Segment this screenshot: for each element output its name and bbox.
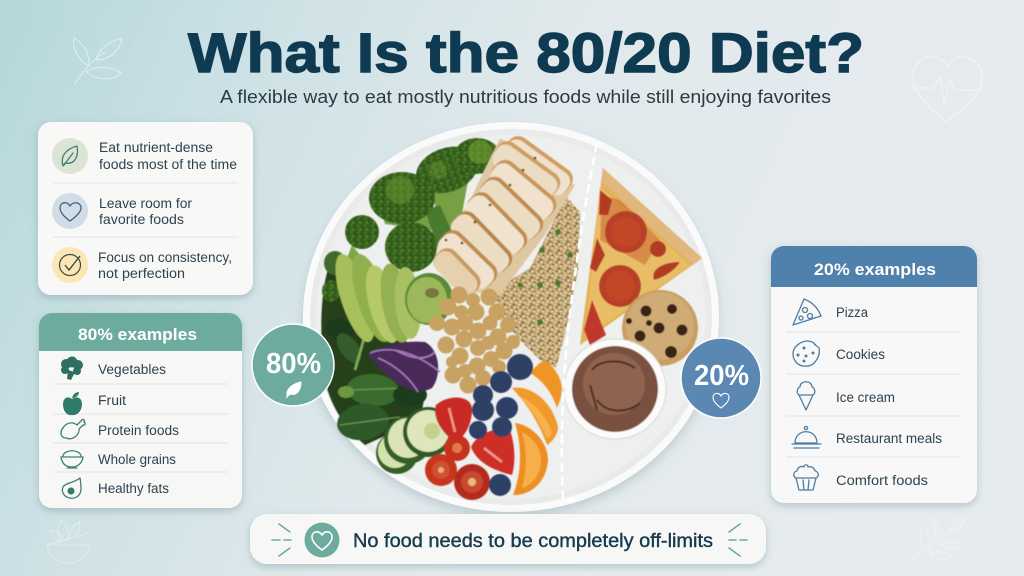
icon: left sparks bbox=[272, 524, 291, 556]
text: nutrient-dense: foods most of the time bbox=[99, 157, 237, 172]
text: nutrient-dense: Eat nutrient-dense bbox=[99, 140, 213, 155]
callout text: No food needs to be completely off-limits bbox=[353, 530, 713, 552]
salad greens bbox=[321, 251, 430, 445]
plate bbox=[303, 122, 719, 512]
heading: 20% examples bbox=[814, 260, 936, 279]
callout: no food off-limits bbox=[250, 514, 766, 564]
icon: right sparks bbox=[729, 524, 747, 556]
quinoa bbox=[495, 195, 580, 368]
pizza slice bbox=[580, 168, 702, 345]
label: Protein foods bbox=[98, 423, 179, 438]
food: 20% side bbox=[564, 168, 702, 439]
icon: avocado bbox=[62, 478, 81, 498]
text: favorite foods: Leave room for bbox=[99, 196, 193, 211]
sliced chicken bbox=[429, 132, 577, 300]
text: consistency: not perfection bbox=[98, 266, 185, 281]
label: Restaurant meals bbox=[836, 431, 942, 446]
icon: heart circle bbox=[304, 522, 340, 558]
icon: heart bbox=[713, 393, 729, 408]
purple cabbage bbox=[368, 342, 440, 392]
dashed divider bbox=[562, 143, 597, 501]
title: What Is the 80/20 Diet? bbox=[188, 21, 864, 84]
chocolate chip cookie bbox=[622, 290, 698, 366]
panel: 20% examples bbox=[771, 246, 977, 503]
label: Healthy fats bbox=[98, 481, 169, 496]
icon: drumstick bbox=[61, 419, 85, 439]
text: favorite foods: favorite foods bbox=[99, 212, 184, 227]
icon: broccoli bbox=[61, 356, 83, 380]
broccoli bbox=[338, 138, 500, 290]
icon: apple bbox=[63, 392, 82, 415]
label: Fruit bbox=[98, 393, 126, 408]
plate illustration bbox=[303, 122, 719, 512]
label: Cookies bbox=[836, 347, 885, 362]
icon: ice cream bbox=[797, 382, 815, 410]
badge: 80%: 80% bbox=[266, 348, 321, 380]
icon: cloche bbox=[792, 426, 821, 448]
decorative icon: heart with pulse bbox=[912, 57, 982, 122]
chickpeas bbox=[429, 286, 520, 394]
icon: check bbox=[52, 247, 88, 283]
food: 80% side bbox=[321, 132, 580, 500]
blueberries bbox=[469, 354, 533, 496]
icon: grain bowl bbox=[61, 451, 83, 468]
icon: cookie bbox=[793, 341, 819, 366]
icon: heart bbox=[52, 193, 88, 229]
label: Comfort foods bbox=[836, 473, 928, 488]
label: Pizza bbox=[836, 305, 868, 320]
badge: 20% bbox=[681, 338, 761, 418]
label: Whole grains bbox=[98, 452, 176, 467]
ice cream bowl bbox=[564, 339, 666, 439]
heading: 80% examples bbox=[78, 325, 197, 344]
subtitle: A flexible way to eat mostly nutritious foods while still enjoying favorites bbox=[220, 86, 831, 107]
badge: 20%: 20% bbox=[694, 360, 749, 392]
decorative icon: bowl with leaves bbox=[47, 520, 90, 563]
icon: leaf bbox=[52, 138, 88, 174]
strawberries bbox=[435, 397, 514, 475]
text: consistency: Focus on consistency, bbox=[98, 250, 232, 265]
icon: leaf bbox=[286, 382, 301, 398]
orange wedges bbox=[512, 360, 562, 495]
label: Vegetables bbox=[98, 362, 166, 377]
avocado slices bbox=[327, 250, 453, 346]
panel: 80% examples bbox=[39, 313, 242, 508]
cucumber slices bbox=[376, 407, 453, 474]
icon: pizza bbox=[793, 299, 821, 325]
badge: 80% bbox=[252, 324, 334, 406]
icon: cupcake bbox=[794, 465, 818, 490]
decorative icon: herb sprig bbox=[905, 517, 966, 563]
label: Ice cream bbox=[836, 390, 895, 405]
decorative icon: leaf sprig bbox=[74, 38, 122, 84]
panel: key principles bbox=[38, 122, 253, 295]
cherry tomatoes bbox=[425, 435, 490, 500]
